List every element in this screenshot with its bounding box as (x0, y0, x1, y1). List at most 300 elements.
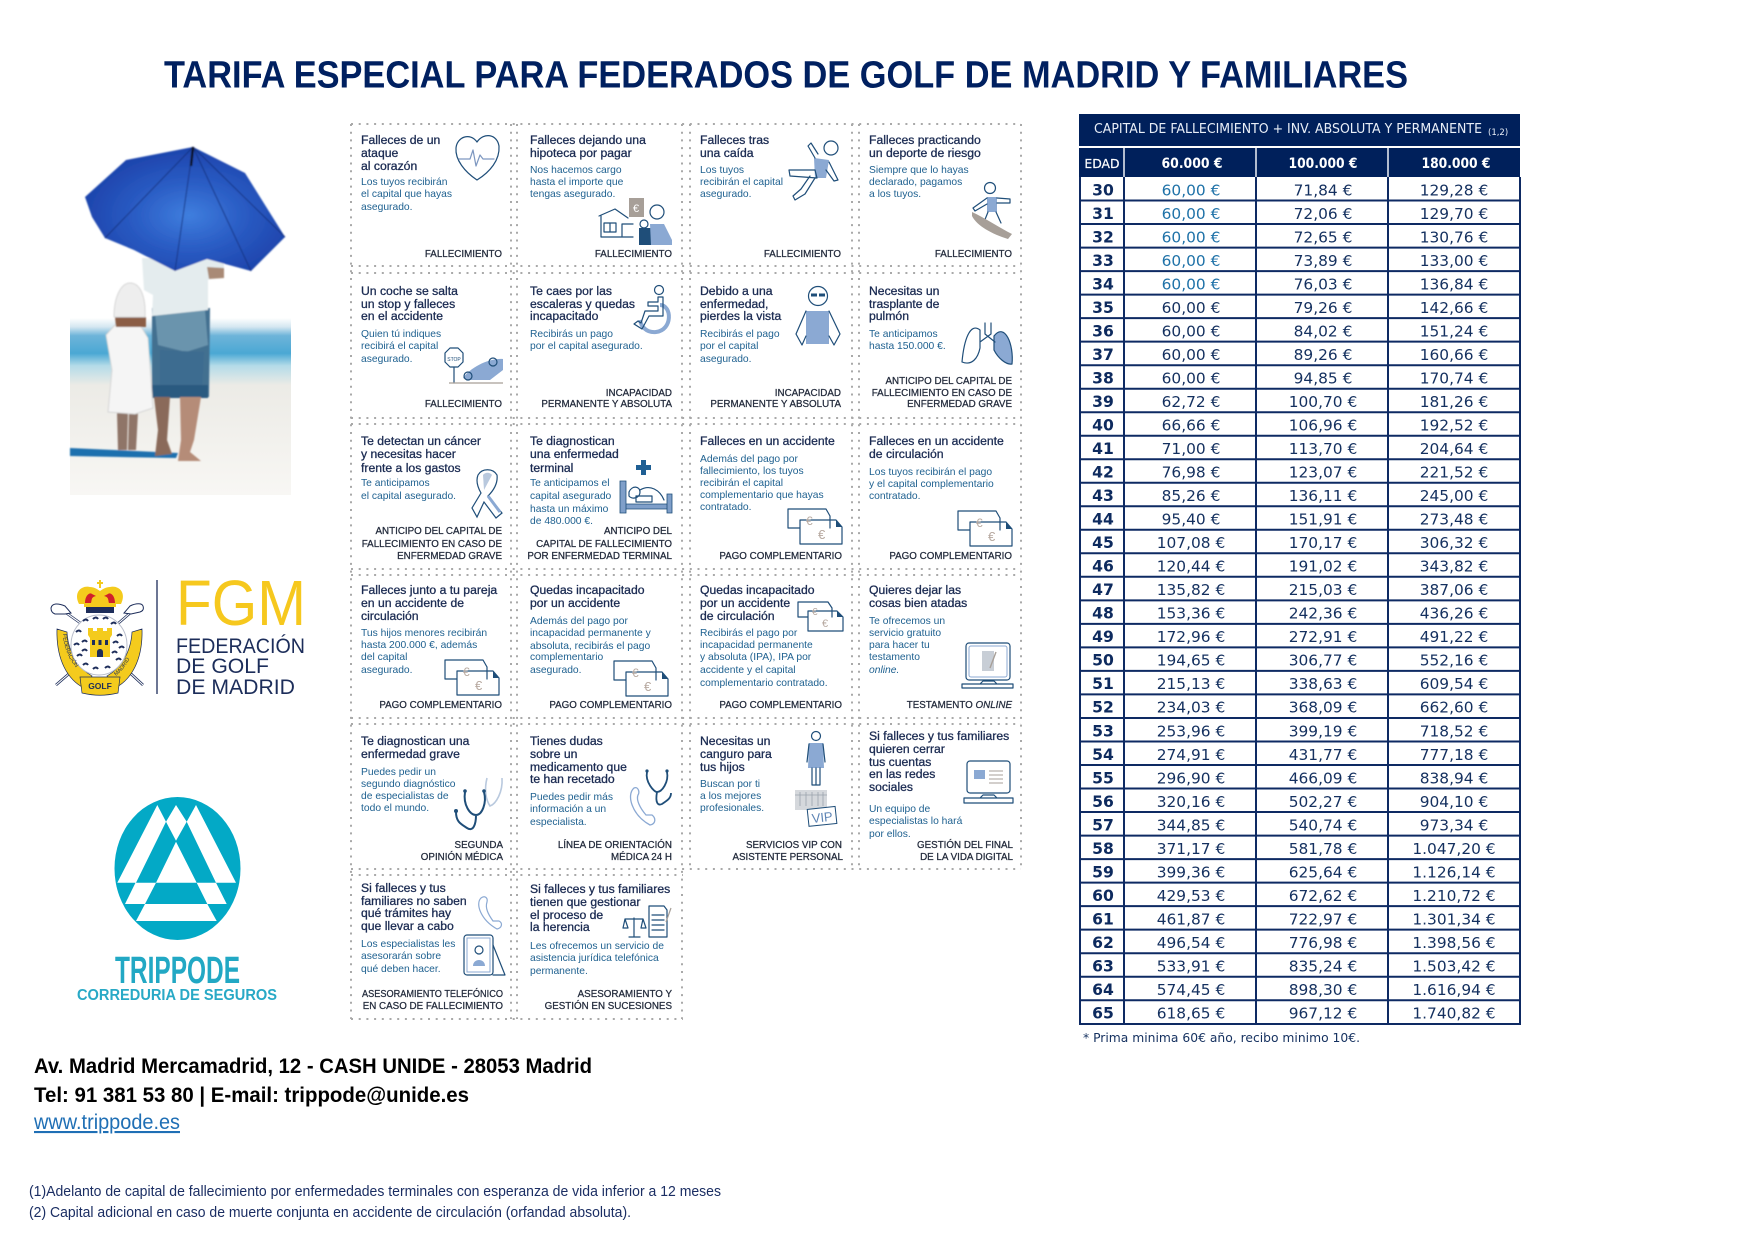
panel: loss of sight (700, 284, 841, 410)
contact block: www.trippode.es (33, 1111, 180, 1134)
pricing table: 1.740,82 € (1412, 1004, 1496, 1022)
pricing table: 76,98 € (1162, 464, 1220, 482)
body: tengas asegurado. (530, 189, 615, 200)
body: asegurado. (361, 354, 413, 365)
pricing table: 76,03 € (1294, 275, 1352, 293)
pricing table: 618,65 € (1157, 1004, 1225, 1022)
heading: una enfermedad (530, 447, 619, 461)
pricing table: 170,74 € (1420, 370, 1488, 388)
pricing table: 1.503,42 € (1412, 958, 1496, 976)
panel: accident death (700, 434, 842, 562)
label: FALLECIMIENTO (935, 249, 1012, 260)
pricing table: 272,91 € (1289, 628, 1357, 646)
panel: online will (869, 583, 1013, 711)
panel: traffic disability (700, 583, 843, 711)
pricing table: 33 (1092, 252, 1114, 270)
body: Recibirás el pago (700, 329, 780, 340)
pricing table: 52 (1092, 699, 1114, 717)
icon: house and family: € (633, 203, 639, 215)
body: contratado. (869, 491, 921, 502)
pricing table: 60,00 € (1162, 346, 1220, 364)
pricing table: 63 (1092, 958, 1114, 976)
heading: tus hijos (700, 760, 745, 774)
heading: pulmón (869, 309, 909, 323)
icon: banknotes (798, 602, 843, 631)
body: incapacidad permanente y (530, 628, 652, 639)
heading: Quedas incapacitado (700, 583, 815, 597)
body: asegurado. (700, 354, 752, 365)
heading: y necesitas hacer (361, 447, 456, 461)
heading: incapacitado (530, 309, 599, 323)
body: y el capital complementario (869, 479, 994, 490)
heading: Te diagnostican (530, 434, 615, 448)
icon: scales and document (623, 906, 671, 937)
pricing table: 609,54 € (1420, 675, 1488, 693)
heading: en las redes (869, 767, 935, 781)
label line three: ENFERMEDAD GRAVE (397, 551, 502, 562)
pricing table: 49 (1092, 628, 1114, 646)
heading: medicamento que (530, 760, 627, 774)
pricing table: 62 (1092, 934, 1114, 952)
pricing table: 204,64 € (1420, 440, 1488, 458)
pricing table: 1.047,20 € (1412, 840, 1496, 858)
icon: banknotes (788, 509, 842, 544)
heading: hipoteca por pagar (530, 146, 632, 160)
body: Te anticipamos (361, 478, 430, 489)
pricing table: 625,64 € (1289, 863, 1357, 881)
label line two: GESTIÓN EN SUCESIONES (545, 1001, 672, 1012)
pricing table: 344,85 € (1157, 816, 1225, 834)
body: complementario contratado. (700, 678, 828, 689)
pricing table: 41 (1092, 440, 1114, 458)
body: Tus hijos menores recibirán (361, 628, 487, 639)
pricing table: 62,72 € (1162, 393, 1220, 411)
body: Te anticipamos (869, 329, 938, 340)
body: Los especialistas les (361, 939, 455, 950)
body: recibirán el capital (700, 478, 783, 489)
heading: qué trámites hay (361, 906, 452, 920)
heading: enfermedad, (700, 297, 768, 311)
heading: Falleces dejando una (530, 133, 646, 147)
pricing table: 136,84 € (1420, 275, 1488, 293)
pricing table: 71,84 € (1294, 181, 1352, 199)
pricing table: 60,00 € (1162, 370, 1220, 388)
pricing table: 60,00 € (1162, 322, 1220, 340)
heading: frente a los gastos (361, 461, 461, 475)
body: especialista. (530, 817, 587, 828)
label: PAGO COMPLEMENTARIO (719, 700, 842, 711)
icon: ribbon (472, 470, 502, 518)
icon: babysitter, crib and VIP card (795, 732, 837, 826)
body: Los tuyos (700, 165, 744, 176)
table column headers (1079, 148, 1520, 177)
heading: Necesitas un (700, 734, 770, 748)
panel: digital life (869, 729, 1014, 863)
icon: phone and tablet (464, 897, 505, 975)
pricing table: 466,09 € (1289, 769, 1357, 787)
pricing table: 64 (1092, 981, 1114, 999)
crest: FEDERACIÓN (63, 634, 79, 668)
pricing table: 39 (1092, 393, 1114, 411)
table title bar: (1,2) (1488, 128, 1508, 138)
table note: * Prima minima 60€ año, recibo minimo 10€. (1083, 1030, 1360, 1045)
pricing table: 72,06 € (1294, 205, 1352, 223)
label line two: PERMANENTE Y ABSOLUTA (710, 399, 841, 410)
pricing table: 43 (1092, 487, 1114, 505)
dotted grid (351, 124, 1021, 1019)
body: Buscan por ti (700, 779, 760, 790)
table column headers: 180.000 € (1422, 156, 1490, 172)
pricing table: 387,06 € (1420, 581, 1488, 599)
heading: Quieres dejar las (869, 583, 961, 597)
heading: de circulación (869, 447, 944, 461)
heading: Falleces practicando (869, 133, 981, 147)
label line two: FALLECIMIENTO EN CASO DE (362, 539, 502, 550)
pricing table: 60 (1092, 887, 1114, 905)
body: por el capital asegurado. (530, 341, 643, 352)
panel: phone advice (361, 881, 505, 1012)
pricing table: 967,12 € (1289, 1004, 1357, 1022)
pricing table: 973,34 € (1420, 816, 1488, 834)
icon: stethoscope (454, 778, 502, 829)
heading: te han recetado (530, 772, 615, 786)
body: especialistas lo hará (869, 816, 963, 827)
pricing table: 59 (1092, 863, 1114, 881)
body: hasta 150.000 €. (869, 341, 946, 352)
footnotes (29, 1184, 721, 1221)
body: a los tuyos. (869, 189, 921, 200)
table column headers: 100.000 € (1288, 156, 1358, 172)
body: fallecimiento, los tuyos (700, 466, 804, 477)
label: TESTAMENTO ONLINE (907, 700, 1012, 711)
pricing table: 60,00 € (1162, 205, 1220, 223)
panel: second opinion (361, 734, 503, 863)
body: qué deben hacer. (361, 964, 441, 975)
pricing table: 1.210,72 € (1412, 887, 1496, 905)
body: asegurado. (530, 665, 582, 676)
body: complementario que hayas (700, 490, 824, 501)
pricing table: 48 (1092, 605, 1114, 623)
icon: banknotes (445, 660, 499, 695)
panel: inheritance (530, 882, 672, 1012)
label: PAGO COMPLEMENTARIO (719, 551, 842, 562)
pricing table: 58 (1092, 840, 1114, 858)
pricing table: 55 (1092, 769, 1114, 787)
body: Quien tú indiques (361, 329, 441, 340)
pricing table: 718,52 € (1420, 722, 1488, 740)
body: Los tuyos recibirán el pago (869, 467, 992, 478)
pricing table: 133,00 € (1420, 252, 1488, 270)
FGM wordmark: FEDERACIÓN (176, 635, 305, 658)
pricing table: 672,62 € (1289, 887, 1357, 905)
pricing table: 31 (1092, 205, 1114, 223)
trippode wordmark: CORREDURIA DE SEGUROS (77, 987, 277, 1004)
pricing table: 106,96 € (1289, 416, 1357, 434)
pricing table: 47 (1092, 581, 1114, 599)
FGM wordmark (176, 567, 306, 699)
label: PAGO COMPLEMENTARIO (379, 700, 502, 711)
pricing table: 45 (1092, 534, 1114, 552)
pricing table: 123,07 € (1289, 464, 1357, 482)
body: recibirá el capital (361, 341, 438, 352)
icon: babysitter, crib and VIP card: VIP (811, 809, 833, 826)
pricing table: 320,16 € (1157, 793, 1225, 811)
heading: un stop y falleces (361, 297, 455, 311)
icon: banknotes: € (644, 679, 652, 694)
body: servicio gratuito (869, 628, 941, 639)
icon: banknotes: € (988, 529, 996, 544)
body: Puedes pedir un (361, 767, 436, 778)
label: INCAPACIDAD (775, 388, 841, 399)
body: hasta un máximo (530, 504, 609, 515)
pricing table: 153,36 € (1157, 605, 1225, 623)
pricing table: 274,91 € (1157, 746, 1225, 764)
footnotes: (1)Adelanto de capital de fallecimiento por enfermedades terminales con esperanza de vida inferior a 12 meses (29, 1184, 721, 1200)
pricing table: 38 (1092, 370, 1114, 388)
heading: canguro para (700, 747, 772, 761)
body: declarado, pagamos (869, 177, 962, 188)
pricing table: 61 (1092, 910, 1114, 928)
pricing table: 129,70 € (1420, 205, 1488, 223)
heading: sociales (869, 780, 913, 794)
icon: banknotes: € (463, 665, 470, 679)
heading: tienen que gestionar (530, 895, 640, 909)
body: online. (869, 665, 899, 676)
pricing table: 54 (1092, 746, 1114, 764)
label line two: FALLECIMIENTO EN CASO DE (872, 388, 1012, 399)
label line two: ASISTENTE PERSONAL (732, 852, 844, 863)
heading: un deporte de riesgo (869, 146, 981, 160)
pricing table: 192,52 € (1420, 416, 1488, 434)
body: hasta 200.000 €, además (361, 640, 477, 651)
logo: Trippode (77, 797, 277, 1004)
pricing table: 107,08 € (1157, 534, 1225, 552)
pricing table: 72,65 € (1294, 228, 1352, 246)
heading: ataque (361, 146, 398, 160)
heading: Si falleces y tus familiares (530, 882, 670, 896)
body: el capital que hayas (361, 189, 452, 200)
body: para hacer tu (869, 640, 930, 651)
body: Nos hacemos cargo (530, 165, 622, 176)
contact block (33, 1055, 592, 1134)
pricing table: 57 (1092, 816, 1114, 834)
panel: traffic accident death (869, 434, 1012, 562)
pricing table: 60,00 € (1162, 252, 1220, 270)
body: asegurado. (361, 665, 413, 676)
heading: pierdes la vista (700, 309, 782, 323)
label: FALLECIMIENTO (425, 399, 502, 410)
label: INCAPACIDAD (606, 388, 672, 399)
body: Puedes pedir más (530, 792, 613, 803)
heading: terminal (530, 461, 573, 475)
heading: Tienes dudas (530, 734, 603, 748)
body: y absoluta (IPA), IPA por (700, 652, 812, 663)
panel: cancer (361, 434, 502, 562)
heading: en un accidente de (361, 596, 464, 610)
pricing table: 95,40 € (1162, 511, 1220, 529)
pricing table: 151,24 € (1420, 322, 1488, 340)
icon: banknotes: € (812, 607, 818, 618)
pricing table: 170,17 € (1289, 534, 1357, 552)
body: Recibirás un pago (530, 329, 613, 340)
heading: trasplante de (869, 297, 940, 311)
pricing table: 722,97 € (1289, 910, 1357, 928)
body: testamento (869, 652, 920, 663)
pricing table: 496,54 € (1157, 934, 1225, 952)
heading: Falleces de un (361, 133, 440, 147)
label: ASESORAMIENTO Y (578, 989, 672, 1000)
heading: Te detectan un cáncer (361, 434, 481, 448)
pricing table: 461,87 € (1157, 910, 1225, 928)
icon: laptop with document (962, 643, 1013, 688)
pricing table: 94,85 € (1294, 370, 1352, 388)
icon: house and family (599, 198, 672, 245)
table title bar (1079, 114, 1520, 146)
body: Los tuyos recibirán (361, 177, 448, 188)
body: capital asegurado (530, 491, 612, 502)
icon: person with dark glasses (796, 286, 840, 345)
heading: familiares no saben (361, 894, 467, 908)
body: incapacidad permanente (700, 640, 813, 651)
heading: tus cuentas (869, 755, 931, 769)
pricing table: 540,74 € (1289, 816, 1357, 834)
pricing table: 221,52 € (1420, 464, 1488, 482)
label line two: MÉDICA 24 H (611, 852, 672, 863)
heading: la herencia (530, 920, 590, 934)
icon: snowboarder (972, 182, 1012, 239)
body: segundo diagnóstico (361, 779, 456, 790)
photo: adult and child under a blue umbrella on the beach (70, 147, 291, 495)
heading: Te diagnostican una (361, 734, 470, 748)
body: Un equipo de (869, 804, 931, 815)
FGM wordmark: FGM (176, 567, 306, 639)
body: complementario (530, 652, 604, 663)
body: información a un (530, 804, 606, 815)
heading: sobre un (530, 747, 577, 761)
pricing table: 306,77 € (1289, 652, 1357, 670)
pricing table: 533,91 € (1157, 958, 1225, 976)
pricing table: 36 (1092, 322, 1114, 340)
crest: MADRID (114, 658, 129, 676)
body: contratado. (700, 502, 752, 513)
pricing table: 160,66 € (1420, 346, 1488, 364)
label: ANTICIPO DEL (604, 526, 673, 537)
heading: Necesitas un (869, 284, 939, 298)
pricing table: 100,70 € (1289, 393, 1357, 411)
icon: laptop (964, 761, 1013, 803)
body: asegurado. (361, 202, 413, 213)
label: PAGO COMPLEMENTARIO (549, 700, 672, 711)
pricing table: 79,26 € (1294, 299, 1352, 317)
heading: Si falleces y tus (361, 881, 446, 895)
pricing table: 662,60 € (1420, 699, 1488, 717)
body: absoluta, recibirás el pago (530, 641, 650, 652)
contact block: Av. Madrid Mercamadrid, 12 - CASH UNIDE - 28053 Madrid (34, 1055, 592, 1078)
label: GESTIÓN DEL FINAL (917, 840, 1014, 851)
heading: al corazón (361, 159, 417, 173)
pricing table: 777,18 € (1420, 746, 1488, 764)
pricing table: 1.616,94 € (1412, 981, 1496, 999)
pricing table: 296,90 € (1157, 769, 1225, 787)
pricing table: 242,36 € (1289, 605, 1357, 623)
pricing table: 436,26 € (1420, 605, 1488, 623)
pricing table: 46 (1092, 558, 1114, 576)
panel: accident disability (530, 583, 672, 711)
pricing table: 245,00 € (1420, 487, 1488, 505)
label line two: EN CASO DE FALLECIMIENTO (363, 1001, 503, 1012)
icon: banknotes (958, 511, 1012, 546)
pricing table: 135,82 € (1157, 581, 1225, 599)
pricing table: 37 (1092, 346, 1114, 364)
pricing table: 30 (1092, 181, 1114, 199)
heading: Un coche se salta (361, 284, 458, 298)
pricing table: 120,44 € (1157, 558, 1225, 576)
pricing table: 66,66 € (1162, 416, 1220, 434)
body: Siempre que lo hayas (869, 165, 969, 176)
body: Les ofrecemos un servicio de (530, 941, 664, 952)
label: ANTICIPO DEL CAPITAL DE (886, 376, 1012, 387)
heading: Debido a una (700, 284, 773, 298)
body: de especialistas de (361, 791, 449, 802)
icon: lungs (962, 323, 1012, 364)
pricing table: 253,96 € (1157, 722, 1225, 740)
body: del capital (361, 652, 407, 663)
pricing table: 89,26 € (1294, 346, 1352, 364)
pricing table: 215,03 € (1289, 581, 1357, 599)
label: FALLECIMIENTO (595, 249, 672, 260)
pricing table: 51 (1092, 675, 1114, 693)
pricing table: 60,00 € (1162, 181, 1220, 199)
pricing table: 60,00 € (1162, 228, 1220, 246)
pricing table: 129,28 € (1420, 181, 1488, 199)
body: permanente. (530, 966, 588, 977)
pricing table: 776,98 € (1289, 934, 1357, 952)
label: FALLECIMIENTO (764, 249, 841, 260)
panel: terminal illness (527, 434, 673, 562)
pricing table: 172,96 € (1157, 628, 1225, 646)
icon: falling person (789, 141, 838, 200)
heading: circulación (361, 609, 419, 623)
panel: fall (700, 133, 841, 260)
heading: por un accidente (530, 596, 620, 610)
heading: escaleras y quedas (530, 297, 635, 311)
logo: Federación de Golf de Madrid (50, 567, 306, 699)
pricing table: 71,00 € (1162, 440, 1220, 458)
label line three: POR ENFERMEDAD TERMINAL (527, 551, 673, 562)
footnotes: (2) Capital adicional en caso de muerte conjunta en accidente de circulación (orfandad absoluta). (29, 1205, 631, 1221)
icon: banknotes: € (818, 527, 826, 542)
icon: banknotes: € (806, 514, 813, 528)
pricing table: 368,09 € (1289, 699, 1357, 717)
body: asesorarán sobre (361, 951, 441, 962)
FGM wordmark: DE GOLF (176, 655, 269, 678)
pricing table: 1.301,34 € (1412, 910, 1496, 928)
body: Recibirás el pago por (700, 628, 798, 639)
heading: el proceso de (530, 908, 603, 922)
label: ANTICIPO DEL CAPITAL DE (376, 526, 502, 537)
table column headers: 60.000 € (1162, 156, 1222, 172)
body: profesionales. (700, 803, 764, 814)
heading: Falleces en un accidente (869, 434, 1004, 448)
body: Además del pago por (700, 454, 798, 465)
heading: una caída (700, 146, 754, 160)
pricing table: 429,53 € (1157, 887, 1225, 905)
pricing table: 491,22 € (1420, 628, 1488, 646)
icon: phone and stethoscope (631, 769, 671, 825)
heading: Falleces en un accidente (700, 434, 835, 448)
label: LÍNEA DE ORIENTACIÓN (558, 840, 672, 851)
heading: Te caes por las (530, 284, 612, 298)
